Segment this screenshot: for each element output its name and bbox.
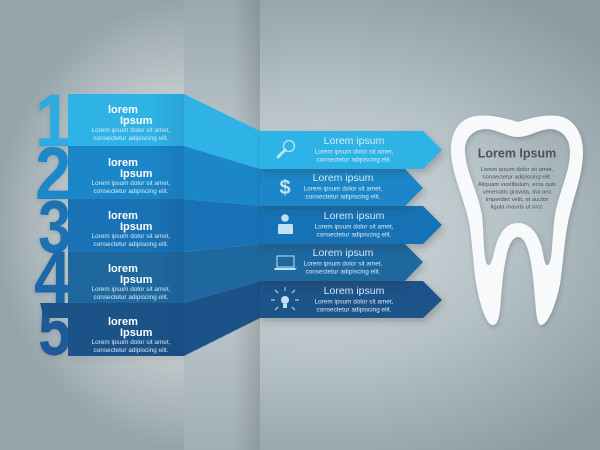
tooth text: imperdiet velit, et auctor	[486, 197, 548, 203]
arrow 3: Lorem ipsum	[324, 210, 385, 222]
arrow 1: Lorem ipsum	[324, 135, 385, 147]
tooth heading: Lorem Ipsum	[478, 146, 556, 160]
arrow 4: consectetur adipiscing elit.	[306, 268, 381, 276]
panel: step 3: Ipsum	[120, 221, 153, 233]
panel: step 3	[68, 199, 260, 252]
panel: step 5: consectetur adipiscing elit.	[94, 347, 169, 354]
arrow 1: consectetur adipiscing elit.	[317, 156, 392, 164]
panel: step 2	[68, 146, 260, 206]
arrow 5: consectetur adipiscing elit.	[317, 306, 392, 314]
panel: step 4: lorem	[108, 263, 138, 275]
number 4: 4	[34, 236, 71, 319]
ribbon shadow	[68, 146, 184, 356]
tooth text: Lorem ipsum dolor sit amet,	[481, 167, 554, 173]
panel: step 5: Ipsum	[120, 327, 153, 339]
panel: step 4: Lorem ipsum dolor sit amet,	[92, 286, 171, 293]
icon: light bulb	[271, 287, 299, 310]
arrow 2: Lorem ipsum dolor sit amet,	[304, 186, 383, 192]
tooth text: Aliquam vestibulum, eros quis	[478, 182, 556, 188]
number 1: 1	[35, 79, 71, 162]
number 2: 2	[35, 132, 71, 215]
arrow 5: Lorem ipsum dolor sit amet,	[315, 298, 394, 306]
arrow 1	[260, 131, 442, 169]
panel: step 5: lorem	[108, 316, 138, 328]
panel: step 4	[68, 244, 260, 303]
panel: step 1: Lorem ipsum dolor sit amet,	[92, 127, 171, 134]
icon: magnifier	[278, 140, 294, 157]
panel: step 4: Ipsum	[120, 274, 153, 286]
icon: laptop	[274, 256, 297, 270]
panel: step 3: consectetur adipiscing elit.	[94, 241, 169, 248]
panel: step 4: consectetur adipiscing elit.	[94, 294, 169, 301]
tooth text: venenatis gravida, dui orci	[483, 190, 551, 196]
tooth	[451, 115, 583, 325]
arrow 2: consectetur adipiscing elit.	[306, 194, 381, 200]
arrow 4	[260, 244, 423, 281]
numbered panels	[34, 79, 260, 372]
tooth text: consectetur adipiscing elit.	[482, 174, 552, 180]
arrow 3	[260, 206, 442, 244]
arrows	[260, 131, 442, 318]
tooth text: ligula mauris ut orci.	[491, 204, 544, 210]
panel: step 3: Lorem ipsum dolor sit amet,	[92, 233, 171, 240]
arrow 3: consectetur adipiscing elit.	[317, 232, 392, 238]
panel: step 1: consectetur adipiscing elit.	[94, 135, 169, 142]
arrow 5: Lorem ipsum	[324, 285, 385, 297]
panel: step 1: lorem	[108, 104, 138, 116]
icon: person	[278, 214, 293, 234]
arrow 3: Lorem ipsum dolor sit amet,	[315, 224, 394, 230]
panel: step 2: lorem	[108, 157, 138, 169]
tooth outline	[451, 115, 583, 325]
arrow 4: Lorem ipsum dolor sit amet,	[304, 260, 383, 268]
panel: step 2: consectetur adipiscing elit.	[94, 188, 169, 195]
panel: step 5	[40, 281, 260, 356]
panel: step 5: Lorem ipsum dolor sit amet,	[92, 339, 171, 346]
arrow 5	[260, 281, 442, 318]
icon: dollar: $	[279, 177, 291, 199]
arrow 2: Lorem ipsum	[313, 172, 374, 184]
panel: step 1: Ipsum	[120, 115, 153, 127]
arrow 2	[260, 169, 423, 206]
panel: step 1	[68, 94, 260, 169]
arrow 4: Lorem ipsum	[313, 247, 374, 259]
panel: step 2: Ipsum	[120, 168, 153, 180]
tooth text	[478, 167, 556, 210]
number 5: 5	[38, 289, 71, 372]
arrow 1: Lorem ipsum dolor sit amet,	[315, 148, 394, 156]
panel: step 3: lorem	[108, 210, 138, 222]
number 3: 3	[38, 186, 71, 269]
panel: step 2: Lorem ipsum dolor sit amet,	[92, 180, 171, 187]
